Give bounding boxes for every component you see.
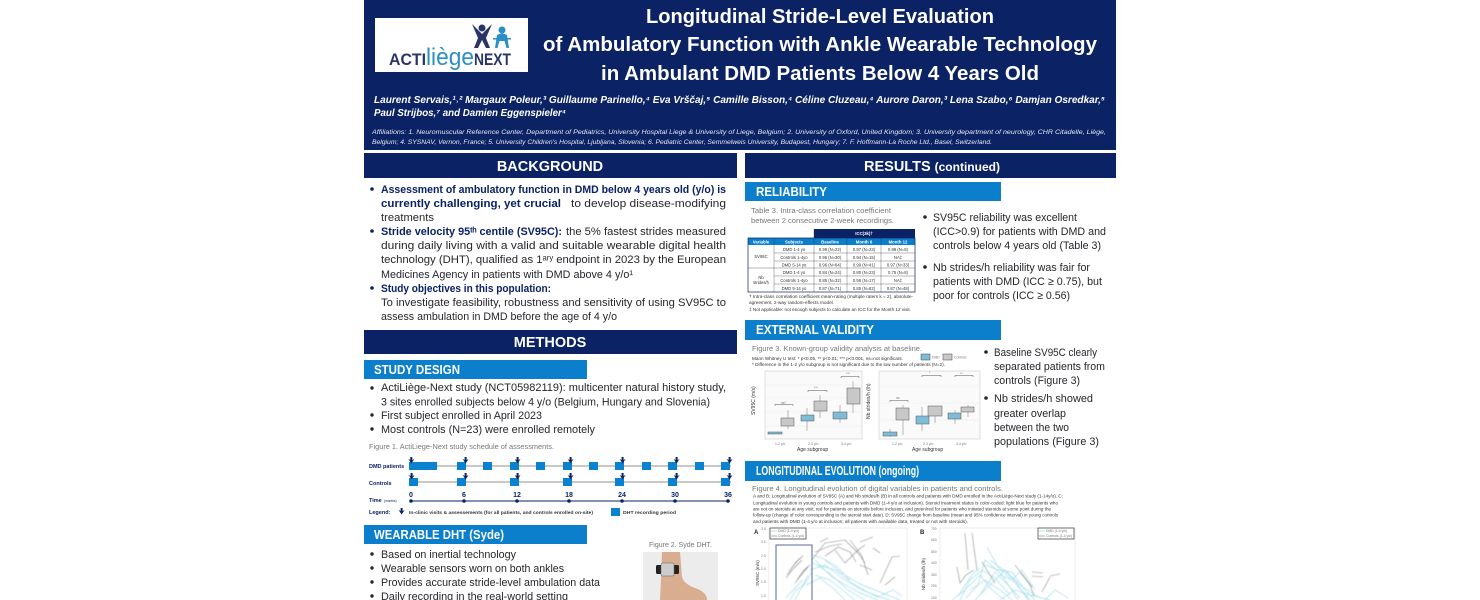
logo: ActiLiège Next bbox=[375, 18, 528, 72]
external validity bullets: separated patients from bbox=[994, 361, 1105, 373]
table 3: intra-class correlation: ICC(3k)† bbox=[855, 231, 873, 236]
logo: ActiLiège Next: NEXT bbox=[474, 50, 511, 69]
reliability bullets: Nb strides/h reliability was fair for bbox=[933, 262, 1090, 274]
figure 3: known-group validity box plots: SV95C (m/s) bbox=[751, 386, 757, 415]
table 3: intra-class correlation: † Intra-class correlation coefficient mean-rating (multiple raters k = 2), absolute- bbox=[749, 294, 914, 299]
figure 1: study schedule: In-clinic visits & assessements (for all patients, and controls enrolled on-site) bbox=[409, 510, 593, 516]
figure 3: known-group validity box plots: *** bbox=[846, 372, 851, 376]
subheading: reliability bbox=[745, 182, 1001, 201]
bullet: assessment: treatments bbox=[381, 212, 435, 224]
chart A: SV95C: A bbox=[754, 530, 759, 536]
figure 1: study schedule: (months) bbox=[384, 499, 397, 503]
bullet: study objectives: Study objectives in this population: bbox=[381, 283, 551, 295]
table 3: intra-class correlation: Variable bbox=[753, 240, 770, 244]
bullet: stride velocity: Medicines Agency in patients with DMD above 4 y/o¹ bbox=[381, 269, 633, 281]
affiliations: Belgium; 4. SYSNAV, Vernon, France; 5. University Children's Hospital, Ljubljana, Slovenia; 6. Pediatric Center, Semmelweis University, Budapest, Hungary; 7. F. Hoffmann-La Roche Ltd., Basel, Switzerland. bbox=[372, 139, 992, 146]
wearable DHT bullets: Based on inertial technology bbox=[381, 549, 516, 561]
table 3: intra-class correlation: DMD 5-14 yo bbox=[782, 262, 807, 268]
figure 1: study schedule: Figure 1. ActiLiege-Next study schedule of assessments. bbox=[369, 444, 554, 451]
reliability bullets: patients with DMD (ICC ≥ 0.75), but bbox=[933, 276, 1102, 288]
chart B: Nb strides/h: Controls (1-4 y/o) bbox=[1046, 534, 1072, 538]
table 3: intra-class correlation: Controls 1-4yo bbox=[780, 278, 808, 283]
figure 1: study schedule bbox=[369, 444, 733, 516]
figure 3: known-group validity box plots: DMD bbox=[932, 356, 940, 360]
table 3: intra-class correlation: 0.99 (N=22) bbox=[819, 247, 842, 252]
wearable DHT bullets bbox=[370, 549, 601, 600]
table 3: intra-class correlation: between 2 consecutive 2-week recordings. bbox=[751, 218, 894, 225]
table 3: intra-class correlation: 0.97 (N=23) bbox=[853, 247, 876, 252]
table 3: intra-class correlation: 0.87 (N=48) bbox=[887, 286, 910, 291]
chart A: SV95C bbox=[754, 527, 907, 600]
figure 3: known-group validity box plots: Controls bbox=[954, 356, 967, 360]
figure 1: study schedule: 0 bbox=[409, 492, 413, 499]
chart B: Nb strides/h: 700 bbox=[931, 527, 937, 531]
subheading: wearable DHT: WEARABLE DHT (Syde) bbox=[374, 528, 504, 542]
heading: results continued bbox=[745, 153, 1116, 178]
title: Longitudinal Stride-Level Evaluation bbox=[646, 5, 994, 28]
table 3: intra-class correlation: 0.56 (N=17) bbox=[853, 278, 876, 283]
figure 3: known-group validity box plots: * Difference in the 1-2 y/o subgroup is not significant due to the low number of patients (N=2). bbox=[752, 362, 945, 367]
table 3: intra-class correlation: 0.84 (N=24) bbox=[819, 270, 842, 275]
study design bullets: Most controls (N=23) were enrolled remotely bbox=[381, 424, 595, 436]
subheading: external validity: EXTERNAL VALIDITY bbox=[756, 323, 875, 337]
figure 4: longitudinal evolution: and patients with DMD (1-4 y/o at inclusion; all patients with available data, treated or not with steroids). bbox=[753, 519, 968, 524]
title: of Ambulatory Function with Ankle Wearable Technology bbox=[543, 33, 1098, 56]
heading: background: BACKGROUND bbox=[497, 159, 603, 175]
reliability bullets: controls below 4 years old (Table 3) bbox=[933, 240, 1101, 252]
bullet: stride velocity: technology (DHT), qualified as 1ᵃʳʸ endpoint in 2023 by the European bbox=[381, 254, 726, 266]
bullet: assessment bbox=[370, 185, 726, 221]
figure 4: longitudinal evolution: follow-up (change of color corresponding to the steroid start date). D: SV95C change from baseline (mean and 95% confidence interval) in young controls bbox=[753, 512, 1059, 518]
subheading: reliability: RELIABILITY bbox=[756, 185, 828, 199]
subheading: longitudinal evolution bbox=[745, 461, 1001, 481]
affiliations: Affiliations: 1. Neuromuscular Reference Center, Department of Pediatrics, University Hospital Liege & University of Liege, Belgium; 2. University of Oxford, United Kingdom; 3. University department of neurology, CHR Citadelle, Liège, bbox=[371, 129, 1106, 136]
study design bullets bbox=[370, 382, 726, 436]
figure 3: known-group validity box plots: 2-3 y/o bbox=[923, 442, 933, 446]
chart B: Nb strides/h: Nb strides/h (/h) bbox=[921, 557, 926, 590]
authors: Paul Strijbos,⁷ and Damien Eggenspieler⁴ bbox=[374, 107, 566, 119]
external validity bullets: Nb strides/h showed bbox=[994, 393, 1093, 405]
chart A: SV95C: 3.0 bbox=[761, 540, 766, 544]
chart B: Nb strides/h: 500 bbox=[931, 550, 937, 554]
bullet: study objectives: assess ambulation in DMD before the age of 4 y/o bbox=[381, 311, 617, 323]
header banner bbox=[364, 0, 1116, 150]
subheading: wearable DHT bbox=[364, 525, 587, 544]
figure 4: longitudinal evolution: Longitudinal evolution in young controls and patients with DMD (1-4 y/o at inclusion). Steroid treatment status is color-coded: light blue for patients who bbox=[753, 500, 1059, 506]
figure 1: study schedule: 18 bbox=[565, 492, 573, 499]
figure 1: study schedule: Controls bbox=[369, 481, 392, 487]
panel: background bbox=[364, 153, 737, 323]
table 3: intra-class correlation: 0.80 (N=23) bbox=[853, 270, 876, 275]
figure 3: known-group validity box plots: 3-4 y/o bbox=[956, 442, 966, 446]
figure 1: study schedule: DHT recording period bbox=[623, 510, 676, 516]
table 3: intra-class correlation: 0.94 (N=15) bbox=[853, 255, 876, 260]
figure 2: Syde DHT photo bbox=[643, 542, 718, 600]
figure 1: study schedule: Legend: bbox=[369, 510, 391, 516]
chart A: SV95C: 2.0 bbox=[761, 567, 766, 571]
wearable DHT bullets: Provides accurate stride-level ambulation data bbox=[381, 577, 601, 589]
reliability bullets: (ICC>0.9) for patients with DMD and bbox=[933, 226, 1106, 238]
table 3: intra-class correlation: Month 12 bbox=[889, 240, 908, 244]
table 3: intra-class correlation: NA‡ bbox=[894, 278, 903, 283]
bullet: stride velocity: the 5% fastest strides measured bbox=[566, 226, 726, 238]
subheading: study design: STUDY DESIGN bbox=[374, 363, 460, 377]
table 3: intra-class correlation: 0.96 (N=64) bbox=[819, 262, 842, 268]
figure 1: study schedule: 36 bbox=[724, 492, 732, 499]
figure 3: known-group validity box plots: ns bbox=[896, 396, 900, 400]
table 3: intra-class correlation: 0.85 (N=62) bbox=[853, 286, 876, 291]
table 3: intra-class correlation: SV95C bbox=[754, 254, 768, 259]
figure 3: known-group validity box plots: 1-2 y/o bbox=[892, 442, 902, 446]
reliability bullets: SV95C reliability was excellent bbox=[933, 212, 1077, 224]
figure 3: known-group validity box plots: * bbox=[929, 371, 931, 375]
table 3: intra-class correlation: strides/h bbox=[753, 280, 770, 285]
bullet: study objectives: To investigate feasibility, robustness and sensitivity of using SV95C to bbox=[381, 297, 726, 309]
external validity bullets: controls (Figure 3) bbox=[994, 375, 1080, 387]
figure 1: study schedule: 6 bbox=[462, 492, 466, 499]
figure 3: known-group validity box plots: Nb strides/h (/h) bbox=[866, 383, 872, 419]
table 3: intra-class correlation: 0.98 (N=8) bbox=[888, 247, 909, 252]
figure 1: study schedule: Time bbox=[369, 498, 382, 504]
table 3: intra-class correlation: NA‡ bbox=[894, 255, 903, 260]
table 3: intra-class correlation: 0.87 (N=71) bbox=[819, 286, 842, 291]
subheading: longitudinal evolution: LONGITUDINAL EVOLUTION (ongoing) bbox=[756, 464, 919, 478]
subheading: study design bbox=[364, 360, 587, 379]
figure 3: known-group validity box plots: 2-3 y/o bbox=[808, 442, 818, 446]
reliability bullets: poor for controls (ICC ≥ 0.56) bbox=[933, 290, 1070, 302]
table 3: intra-class correlation: DMD 5-14 yo bbox=[782, 286, 807, 291]
chart A: SV95C: 3.5 bbox=[761, 527, 766, 531]
logo: ActiLiège Next: liège bbox=[426, 44, 474, 71]
chart B: Nb strides/h: 400 bbox=[931, 561, 937, 565]
figure 3: known-group validity box plots: Age subgroup bbox=[912, 447, 943, 453]
table 3: intra-class correlation: ‡ Not applicable: not enough subjects to calculate an ICC for the Month 12 visit. bbox=[749, 307, 911, 312]
chart A: SV95C: DMD (1-4 y/o) bbox=[778, 529, 799, 533]
figure 4: longitudinal evolution bbox=[752, 486, 1075, 600]
table 3: intra-class correlation: 0.85 (N=32) bbox=[819, 278, 842, 283]
external validity bullets: greater overlap bbox=[994, 408, 1066, 420]
external validity bullets: Baseline SV95C clearly bbox=[994, 347, 1097, 359]
figure 1: study schedule: 12 bbox=[513, 492, 521, 499]
table 3: intra-class correlation: 0.97 (N=33) bbox=[887, 262, 910, 268]
heading: methods bbox=[364, 330, 737, 354]
table 3: intra-class correlation: 0.96 (N=30) bbox=[819, 255, 842, 260]
figure 3: known-group validity box plots: Age subgroup bbox=[797, 447, 828, 453]
figure 3: known-group validity box plots: 1-2 y/o bbox=[775, 442, 785, 446]
figure 3: known-group validity box plots: ** bbox=[960, 372, 963, 376]
title bbox=[544, 8, 1097, 80]
authors bbox=[374, 94, 1105, 119]
external validity bullets: between the two bbox=[994, 422, 1069, 434]
figure 4: longitudinal evolution: are not on steroids at any visit, red for patients on steroids before inclusion, and green/red for patients who initiated steroids at some point during the bbox=[753, 506, 1052, 512]
chart B: Nb strides/h: 600 bbox=[931, 538, 937, 542]
bullet: stride velocity: during daily living with a valid and suitable wearable digital health bbox=[381, 240, 726, 252]
chart A: SV95C: Controls (1-4 y/o) bbox=[778, 534, 804, 538]
bullet: assessment: to develop disease-modifying bbox=[571, 198, 726, 210]
chart B: Nb strides/h: DMD (1-4 y/o) bbox=[1046, 529, 1067, 533]
table 3: intra-class correlation: DMD 1-4 yo bbox=[783, 270, 806, 275]
figure 1: study schedule: DMD patients bbox=[369, 464, 404, 470]
figure 4: longitudinal evolution: Figure 4. Longitudinal evolution of digital variables in patients and controls. bbox=[752, 486, 1003, 493]
chart A: SV95C: SV95C (m/s) bbox=[755, 560, 760, 586]
chart B: Nb strides/h: 200 bbox=[931, 584, 937, 588]
table 3: intra-class correlation: Baseline bbox=[821, 240, 839, 244]
heading: background bbox=[364, 153, 737, 178]
table 3: intra-class correlation: DMD 1-4 yo bbox=[783, 247, 806, 252]
table 3: intra-class correlation: 0.99 (N=41) bbox=[853, 262, 876, 268]
table 3: intra-class correlation: 0.75 (N=8) bbox=[888, 270, 909, 275]
table 3: intra-class correlation: Table 3. Intra-class correlation coefficient bbox=[751, 208, 891, 215]
chart B: Nb strides/h: 300 bbox=[931, 573, 937, 577]
external validity bullets bbox=[984, 347, 1105, 448]
study design bullets: 3 sites enrolled subjects below 4 y/o (Belgium, Hungary and Slovenia) bbox=[381, 396, 710, 408]
bullet: assessment: Assessment of ambulatory function in DMD below 4 years old (y/o) is bbox=[381, 184, 726, 196]
figure 3: known-group validity box plots: Mann Whitney U test: * p<0.05, ** p<0.01, *** p<0.001, ns=not significant. bbox=[752, 356, 903, 361]
panel: results bbox=[745, 153, 1116, 600]
table 3: intra-class correlation: Subjects bbox=[785, 240, 804, 244]
reliability bullets bbox=[923, 212, 1106, 302]
chart A: SV95C: 2.5 bbox=[761, 554, 766, 558]
figure 3: known-group validity box plots: ns* bbox=[781, 401, 787, 405]
figure 1: study schedule: 30 bbox=[671, 492, 679, 499]
heading: methods: METHODS bbox=[514, 335, 587, 351]
figure 2: Syde DHT photo: Figure 2. Syde DHT. bbox=[649, 542, 712, 549]
chart B: Nb strides/h: B bbox=[920, 530, 925, 536]
figure 3: known-group validity box plots: 3-4 y/o bbox=[841, 442, 851, 446]
chart A: SV95C: 1.5 bbox=[761, 580, 766, 584]
heading: results continued: RESULTS (continued) bbox=[864, 159, 1000, 175]
figure 1: study schedule: 24 bbox=[618, 492, 626, 499]
affiliations bbox=[371, 129, 1106, 146]
bullet: assessment: currently challenging, yet crucial bbox=[381, 198, 561, 210]
chart B: Nb strides/h bbox=[920, 527, 1075, 600]
figure 3: known-group validity box plots bbox=[751, 346, 980, 453]
authors: Laurent Servais,¹˒² Margaux Poleur,³ Guillaume Parinello,⁴ Eva Vrščaj,⁵ Camille Bisson,⁴ Céline Cluzeau,⁴ Aurore Daron,³ Lena Szabo,⁶ Damjan Osredkar,⁵ bbox=[374, 94, 1105, 106]
figure 4: longitudinal evolution: A and B: Longitudinal evolution of SV95C (A) and Nb strides/h (B) in all controls and patients with DMD enrolled in the ActiLiège-Next study (1-14y/o). C: bbox=[753, 494, 1063, 498]
bullet: stride velocity: Stride velocity 95ᵗʰ centile (SV95C): bbox=[381, 226, 562, 238]
logo: ActiLiège Next: ACTI bbox=[389, 50, 426, 69]
bullet: stride velocity bbox=[370, 226, 726, 281]
chart B: Nb strides/h: 100 bbox=[931, 596, 937, 600]
chart A: SV95C: 1.0 bbox=[761, 594, 766, 598]
table 3: intra-class correlation bbox=[748, 208, 915, 312]
study design bullets: ActiLiège-Next study (NCT05982119): multicenter natural history study, bbox=[381, 382, 726, 394]
bullet: study objectives bbox=[370, 283, 726, 323]
subheading: external validity bbox=[745, 320, 1001, 340]
study design bullets: First subject enrolled in April 2023 bbox=[381, 410, 542, 422]
figure 3: known-group validity box plots: Figure 3. Known-group validity analysis at baseline. bbox=[752, 346, 922, 353]
table 3: intra-class correlation: Month 6 bbox=[856, 240, 873, 244]
table 3: intra-class correlation: Controls 1-4yo bbox=[780, 255, 808, 260]
table 3: intra-class correlation: agreement, 2-way random-effects model. bbox=[749, 300, 834, 305]
figure 3: known-group validity box plots: *** bbox=[814, 386, 819, 390]
external validity bullets: populations (Figure 3) bbox=[994, 436, 1099, 448]
panel: methods bbox=[364, 330, 737, 600]
wearable DHT bullets: Wearable sensors worn on both ankles bbox=[381, 563, 564, 575]
table 3: intra-class correlation: Nb bbox=[758, 275, 764, 280]
title: in Ambulant DMD Patients Below 4 Years Old bbox=[601, 62, 1039, 85]
